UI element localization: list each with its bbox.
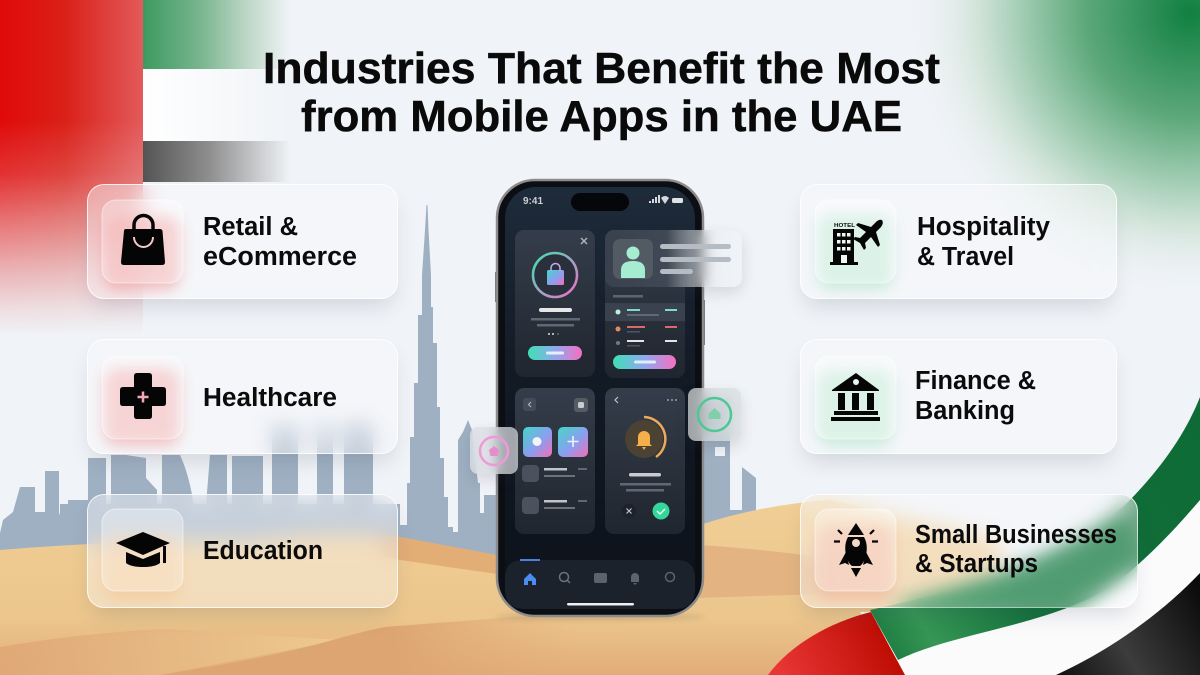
panel: Retail & eCommerce — [87, 184, 398, 299]
UAE flag wave — [768, 397, 1200, 675]
green corner glow — [900, 0, 1200, 300]
app card: transactions — [605, 230, 685, 378]
title: Industries That Benefit the Most — [263, 44, 940, 93]
floating green ring tile — [688, 388, 741, 441]
label: & Startups — [914, 550, 1038, 578]
label: eCommerce — [202, 242, 356, 270]
label: Hospitality — [916, 212, 1050, 240]
label — [914, 520, 1116, 578]
tricolour flag bands — [143, 0, 293, 182]
icon tile: hotel and plane: HOTEL — [834, 222, 855, 228]
label — [916, 212, 1050, 270]
app card: shop — [515, 230, 595, 377]
label: & Travel — [916, 242, 1014, 270]
icon tile: rocket — [814, 508, 896, 600]
label: Education — [202, 536, 322, 564]
desert dunes — [0, 500, 1000, 675]
panel: Small Businesses & Startups — [800, 494, 1138, 608]
bottom navigation bar — [505, 559, 695, 609]
label — [202, 212, 356, 270]
icon tile: bank — [814, 356, 896, 446]
panel: Healthcare — [87, 339, 398, 454]
placeholder lines — [660, 244, 731, 274]
label: Finance & — [914, 366, 1036, 394]
city skyline — [0, 205, 756, 560]
icon tile: graduation cap — [102, 508, 182, 600]
floating profile card — [605, 230, 742, 287]
status bar: 9:41 — [523, 196, 543, 207]
app card: quick actions — [515, 388, 595, 534]
phone body — [495, 180, 705, 616]
app card: notification — [605, 388, 685, 534]
floating pink ring tile — [470, 427, 518, 474]
label — [914, 366, 1036, 424]
panel: Hospitality & Travel — [800, 184, 1117, 299]
panel: Finance & Banking — [800, 339, 1117, 454]
status bar — [523, 193, 683, 211]
icon tile: shopping bag — [102, 200, 182, 290]
label: Small Businesses — [914, 520, 1116, 548]
label: Healthcare — [202, 384, 336, 412]
icon tile: medical cross — [102, 356, 182, 446]
green flag showing through the glass — [900, 516, 1140, 612]
avatar — [613, 239, 653, 279]
icon tile: hotel and plane — [814, 200, 896, 290]
red flag bar — [0, 0, 143, 335]
panel: Education — [87, 494, 398, 608]
title: from Mobile Apps in the UAE — [301, 92, 902, 141]
label: Banking — [914, 396, 1014, 424]
label: Retail & — [202, 212, 298, 240]
